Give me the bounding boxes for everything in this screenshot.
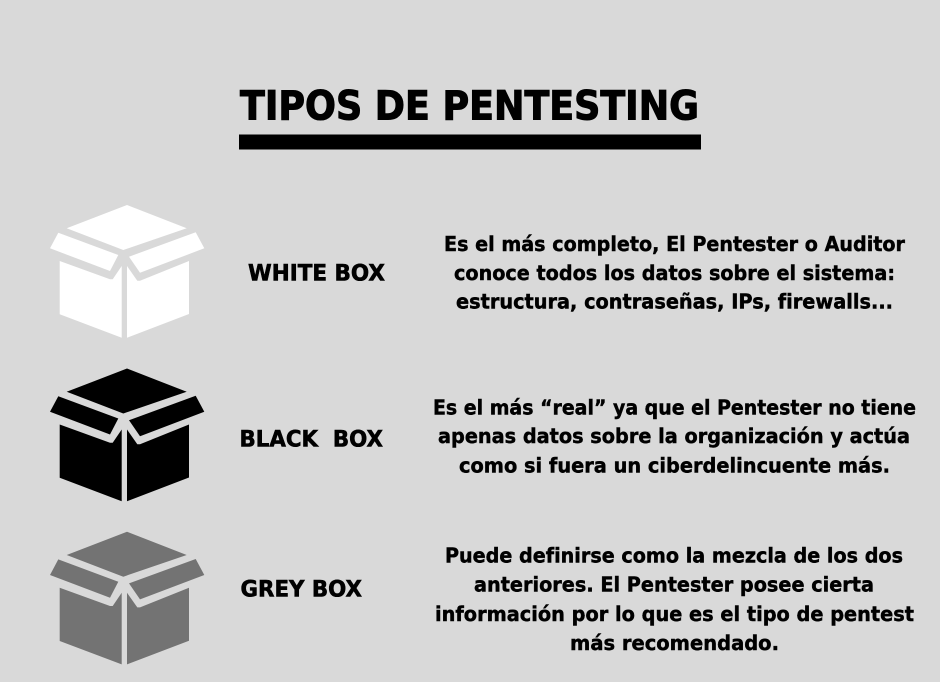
title underline bar xyxy=(239,134,701,150)
label: grey box: GREY BOX xyxy=(240,576,362,602)
description: grey box: información por lo que es el tipo de pentest xyxy=(435,602,914,626)
title: TIPOS DE PENTESTING xyxy=(240,82,699,130)
description: black box xyxy=(433,396,916,478)
description: black box: como si fuera un ciberdelincuente más. xyxy=(459,454,890,478)
description: grey box xyxy=(435,543,914,655)
icon: black box xyxy=(50,368,204,501)
description: grey box: anteriores. El Pentester posee cierta xyxy=(474,573,874,597)
description: black box: Es el más “real” ya que el Pentester no tiene xyxy=(433,396,916,420)
description: white box: conoce todos los datos sobre el sistema: xyxy=(454,261,895,285)
description: black box: apenas datos sobre la organización y actúa xyxy=(438,424,910,448)
description: grey box: más recomendado. xyxy=(570,631,779,655)
icon: grey box xyxy=(50,532,204,664)
description: white box: estructura, contraseñas, IPs, firewalls... xyxy=(456,290,893,314)
description: grey box: Puede definirse como la mezcla de los dos xyxy=(445,543,903,567)
label: white box: WHITE BOX xyxy=(248,260,385,286)
description: white box xyxy=(444,232,905,314)
description: white box: Es el más completo, El Pentester o Auditor xyxy=(444,232,905,256)
label: black box: BLACK BOX xyxy=(240,426,383,452)
icon: white box xyxy=(50,205,204,338)
